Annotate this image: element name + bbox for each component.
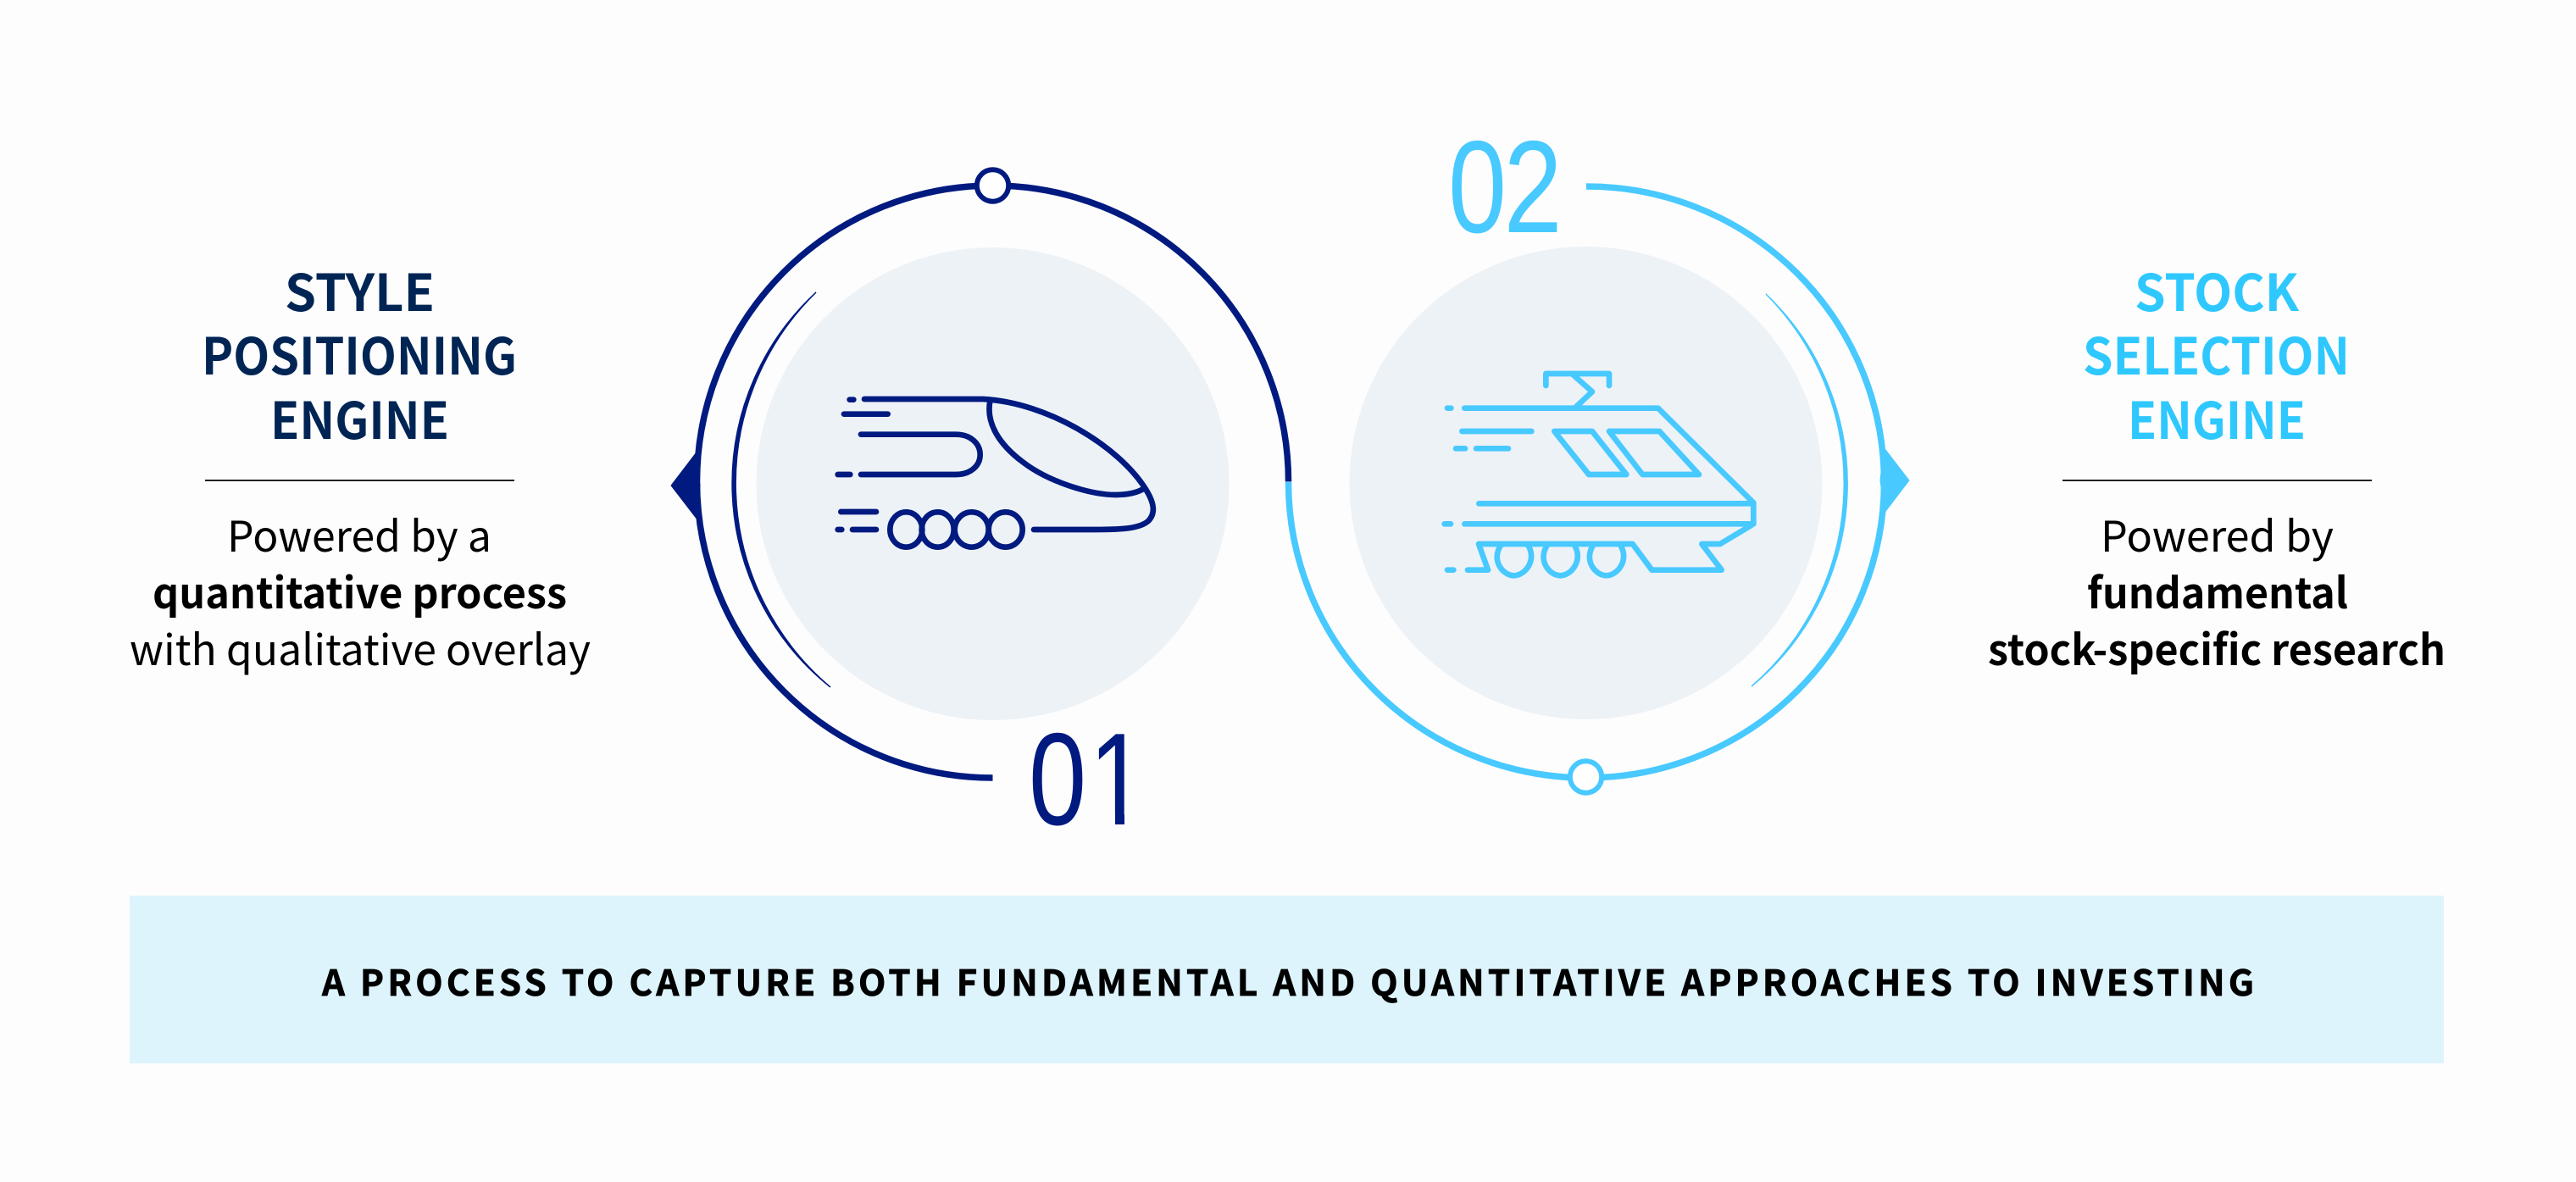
text block: fundamental research description: Powered by [2101,503,2334,564]
panel: stock selection engine text [1988,252,2446,678]
number 01 [1032,732,1124,825]
number 01: 0 [1029,706,1086,852]
ring: engine 02 [1288,186,1885,778]
heading: stock selection engine: SELECTION [2083,316,2350,390]
text block: fundamental research description: fundamental [2087,560,2348,621]
ring: engine 01 [697,186,1288,778]
panel: engine 02 ring and icon [1288,114,1909,793]
inner arc [1752,294,1847,686]
text block: fundamental research description: stock-specific research [1988,617,2446,678]
arrow: left pointer [671,453,700,519]
callout: bottom banner [130,896,2444,1063]
icon: electric train [1445,374,1753,575]
arrow: right pointer [1880,447,1909,513]
background disc [756,247,1229,720]
text block: quantitative process description: quantitative process [153,560,567,621]
text block: fundamental research description [1988,503,2446,678]
ring node: bottom [1570,761,1602,793]
text block: quantitative process description: Powered by a [227,503,491,564]
panel: style positioning engine text [130,252,591,678]
heading: stock selection engine: ENGINE [2128,380,2306,454]
inner arc [732,292,830,687]
background disc [1349,247,1822,719]
number 01: 1 [1089,706,1146,852]
heading: stock selection engine [2083,252,2350,454]
text block: quantitative process description: with qualitative overlay [130,617,591,678]
text block: quantitative process description [130,503,591,678]
heading: style positioning engine: ENGINE [270,380,449,454]
icon: bullet train [838,399,1153,547]
number 02: 0 [1448,114,1507,260]
heading: style positioning engine: STYLE [285,252,435,326]
panel: engine 01 ring and icon [671,169,1288,852]
ring node: top [977,169,1008,202]
heading: stock selection engine: STOCK [2135,252,2300,326]
callout: bottom banner: A PROCESS TO CAPTURE BOTH FUNDAMENTAL AND QUANTITATIVE APPROACHES TO INVESTING [321,955,2254,1007]
heading: style positioning engine [202,252,517,454]
number 02: 2 [1504,114,1563,260]
heading: style positioning engine: POSITIONING [202,316,517,390]
